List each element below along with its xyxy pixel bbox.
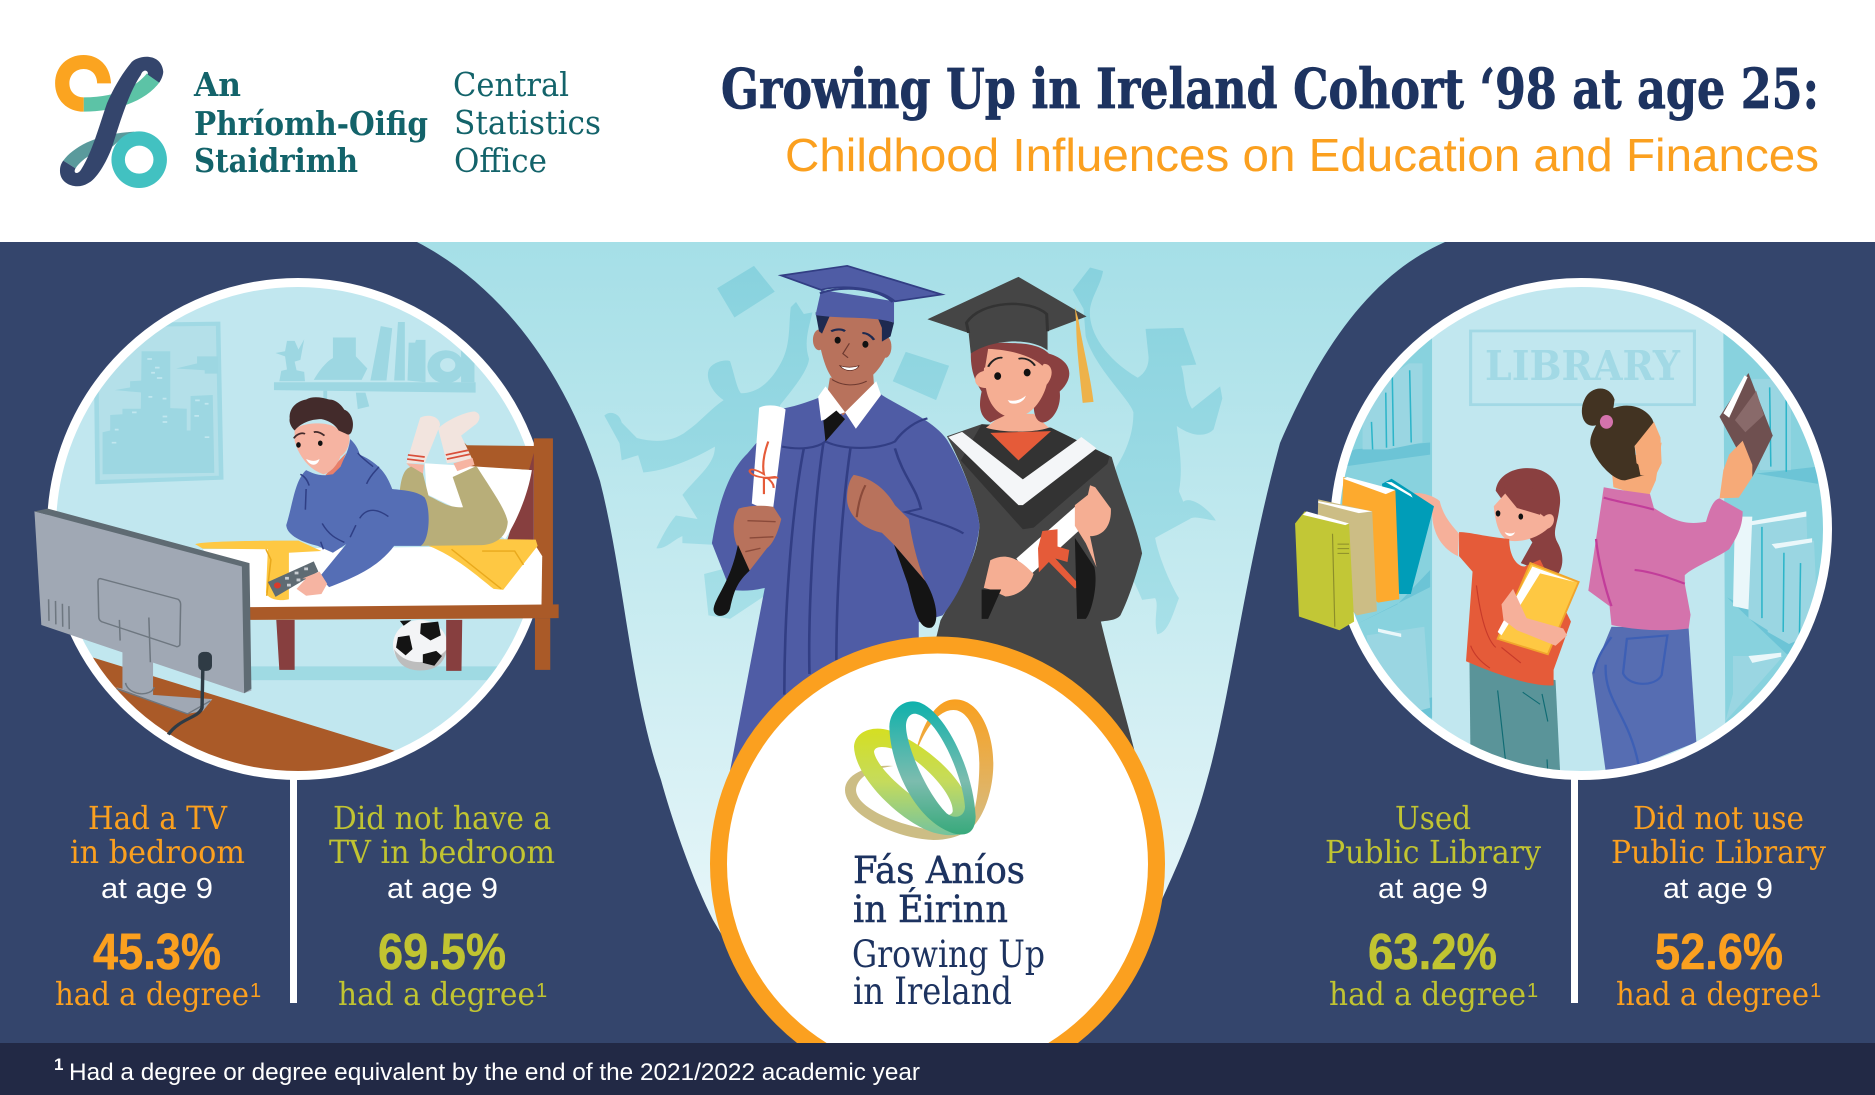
stat: had a TV (55, 799, 261, 1013)
LIBRARY sign text: LIBRARY (1485, 342, 1681, 390)
illustration: book stack (1295, 477, 1434, 630)
stat: had a TV: 45.3% (93, 923, 221, 980)
mortarboard (927, 277, 1087, 354)
central light bell shape (417, 242, 1445, 1000)
blanket (195, 539, 538, 600)
face and neck (325, 453, 346, 475)
stat: no TV: 69.5% (378, 923, 506, 980)
shelf (274, 382, 476, 409)
text: English programme name (852, 933, 1045, 1013)
remote and hand (268, 561, 318, 597)
trousers (400, 466, 508, 546)
stat: no TV: at age 9 (387, 873, 498, 905)
ears, head, hair (813, 330, 825, 350)
stat: used library: Public Library (1325, 833, 1541, 871)
text: English office name: Statistics (454, 103, 601, 142)
scroll (752, 405, 786, 513)
stat: used library: 63.2% (1368, 923, 1497, 980)
bed frame and legs (276, 620, 462, 671)
text: English office name (453, 65, 601, 180)
stat: had a TV: in bedroom (70, 833, 245, 871)
hair back (971, 343, 1069, 423)
illustration: graduates (604, 266, 1222, 770)
hoodie (286, 439, 429, 587)
figure: female graduate (904, 277, 1142, 770)
ball (393, 620, 447, 670)
panel: library scene (1295, 270, 1849, 790)
stat: no TV: had a degree (338, 975, 535, 1013)
stat: had a TV: at age 9 (101, 873, 213, 905)
stat: had a TV: had a degree (55, 975, 249, 1013)
pillow (425, 463, 532, 539)
text: English programme name: in Ireland (853, 970, 1012, 1013)
socks (406, 416, 440, 463)
text: English office name: Office (454, 141, 547, 180)
mattress (203, 546, 542, 608)
stat: used library (1325, 799, 1541, 1013)
stat: no TV (329, 799, 555, 1013)
CSO logo (55, 55, 601, 188)
ring: TV circle (52, 282, 544, 776)
stat: used library: at age 9 (1378, 873, 1488, 905)
divider: TV panel (290, 778, 297, 1003)
text: Irish programme name (853, 849, 1025, 931)
LIBRARY sign frame (1471, 331, 1694, 405)
text: English office name: Central (453, 65, 569, 104)
stat: did not use library: Did not use (1633, 799, 1804, 837)
footer bar (0, 1043, 1875, 1095)
subtitle: Childhood Influences on Education and Finances (785, 129, 1819, 181)
shelved books (1363, 363, 1818, 721)
text: Irish programme name: in Éirinn (853, 887, 1008, 931)
mortarboard (816, 290, 894, 323)
stat: used library: Used (1395, 799, 1471, 837)
Growing Up in Ireland logo (845, 699, 1045, 1013)
text: Irish programme name: Fás Aníos (853, 849, 1025, 892)
figure: male graduate (712, 266, 979, 770)
girl (1469, 663, 1560, 773)
face (975, 343, 1052, 417)
icon: butterfly loops (845, 699, 993, 840)
stat: had a TV: 1 (250, 980, 261, 1002)
stat: no TV: 1 (536, 980, 547, 1002)
stat: used library: had a degree (1329, 975, 1526, 1013)
text: Irish office name: Phríomh-Oifig (194, 104, 428, 143)
scroll and ribbon (1016, 507, 1082, 576)
divider: library panel (1571, 778, 1578, 1003)
hands and sleeves (734, 506, 781, 571)
room background (56, 287, 534, 771)
library background (1340, 287, 1823, 771)
navy band background (0, 242, 1875, 1043)
text: Irish office name: An (193, 65, 241, 104)
stat: did not use library: had a degree (1616, 975, 1809, 1013)
stat: had a TV: Had a TV (88, 799, 228, 837)
stat: did not use library: Public Library (1611, 833, 1826, 871)
woman (1592, 627, 1696, 771)
stat: did not use library (1611, 799, 1826, 1013)
television (122, 649, 153, 696)
stat: used library: 1 (1527, 980, 1538, 1002)
stat: did not use library: 52.6% (1655, 923, 1783, 980)
skirting and floor (245, 666, 505, 680)
text: English programme name: Growing Up (852, 933, 1045, 976)
stat: did not use library: at age 9 (1663, 873, 1773, 905)
illustration: boy on bed (34, 397, 559, 735)
neck and collar (828, 374, 874, 416)
ring: library circle (1334, 282, 1828, 776)
text: Irish office name (193, 65, 428, 180)
footnote: Had a degree or degree equivalent by the end of the 2021/2022 academic year (69, 1059, 920, 1086)
icon: CSO knot mark (55, 55, 167, 188)
text: Irish office name: Staidrimh (194, 141, 358, 180)
stat: no TV: TV in bedroom (329, 833, 555, 871)
panel: TV scene (34, 270, 560, 790)
stat: did not use library: 1 (1810, 980, 1821, 1002)
stat: no TV: Did not have a (333, 799, 551, 837)
silhouettes: jumping graduates (604, 266, 1222, 634)
hands (1075, 485, 1111, 567)
footnote: 1 (54, 1055, 63, 1074)
centre logo ring (718, 645, 1156, 1083)
header background (0, 0, 1875, 242)
